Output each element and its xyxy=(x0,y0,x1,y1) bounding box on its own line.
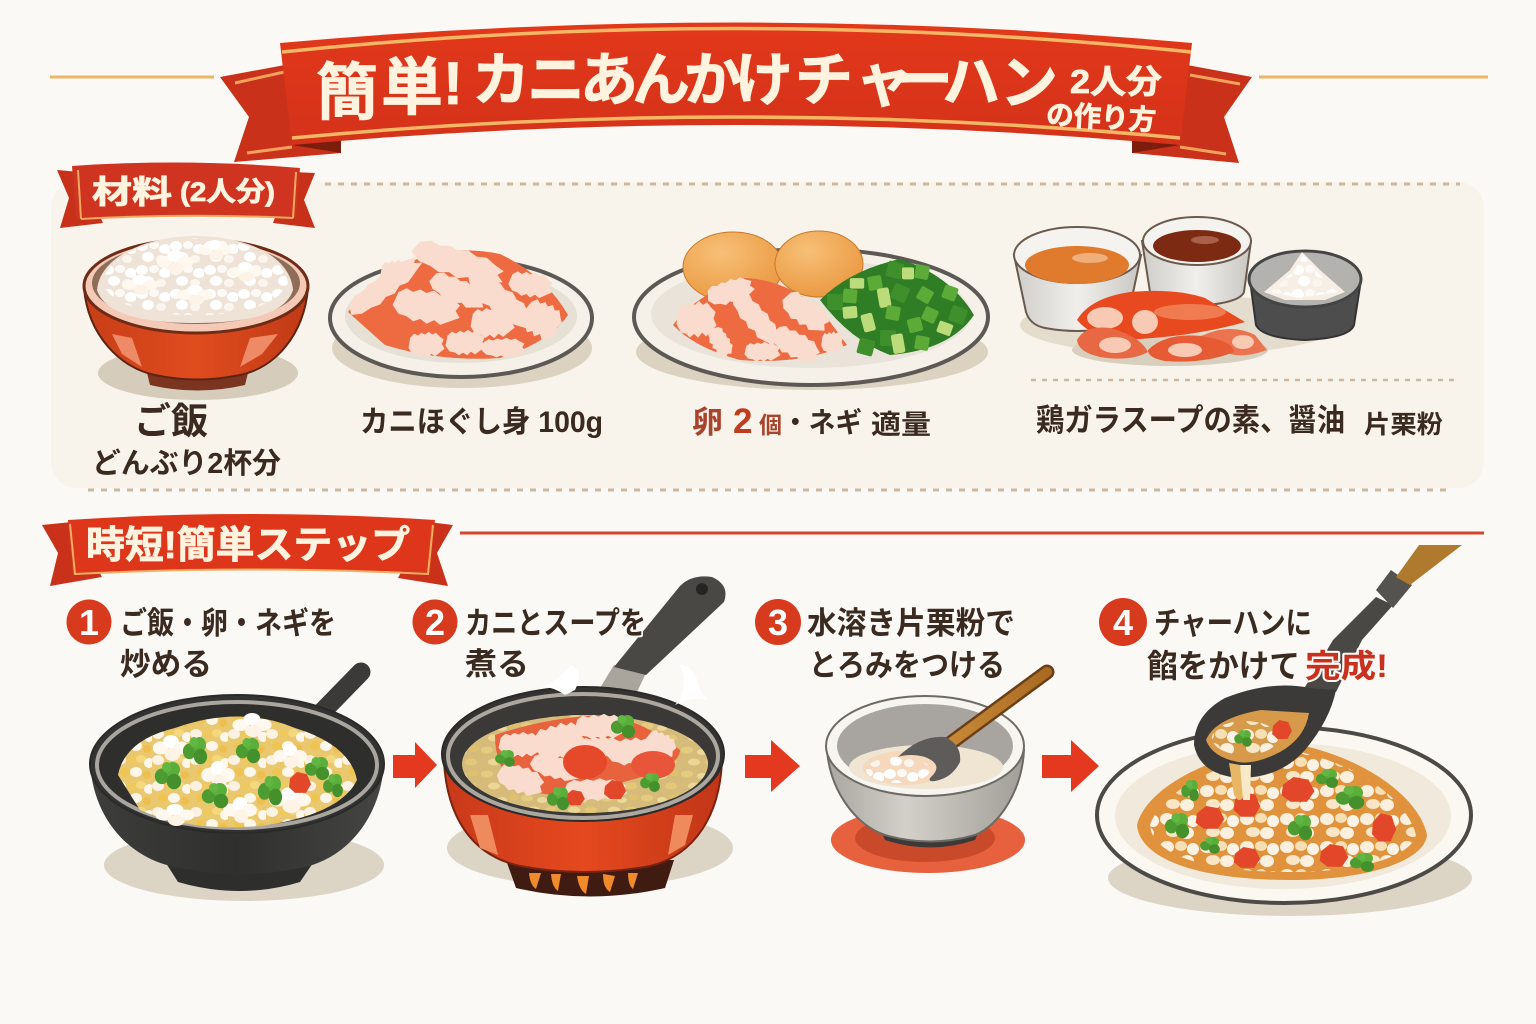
step 4 text: 完成! xyxy=(1305,648,1388,684)
label: egg and onion: 個 xyxy=(759,412,782,438)
step 4 text: チャーハンに xyxy=(1154,606,1312,641)
step 4 plate illustration xyxy=(1097,545,1472,916)
step 1 text: ご飯・卵・ネギを xyxy=(120,606,336,641)
label: egg and onion: 2 xyxy=(733,402,752,441)
ladle xyxy=(1194,545,1462,800)
step 1 number xyxy=(66,600,112,644)
step 2 pot illustration xyxy=(442,576,733,896)
step 2 number: 2 xyxy=(425,602,445,643)
step 1 text xyxy=(120,606,336,682)
ingredients heading ribbon: 材料 xyxy=(92,174,172,210)
step 1 xyxy=(66,600,384,901)
label: rice: ご飯 xyxy=(134,401,208,442)
step 3 number: 3 xyxy=(768,602,788,643)
title sub text: 2人分 xyxy=(1070,63,1162,100)
fried rice xyxy=(1137,745,1427,880)
label: seasonings: 片栗粉 xyxy=(1364,411,1443,439)
label: egg and onion: ・ネギ xyxy=(782,407,862,438)
step 4 number xyxy=(1099,598,1147,646)
label: rice: どんぶり2杯分 xyxy=(92,447,281,480)
arrow 2 xyxy=(745,740,800,792)
panel background xyxy=(51,182,1484,488)
burner xyxy=(506,860,674,896)
step 2 text xyxy=(465,606,646,682)
label: seasonings: 鶏ガラスープの素、醤油 xyxy=(1036,403,1345,438)
panel: ingredients xyxy=(51,162,1484,490)
step 3 text xyxy=(807,606,1015,683)
label: egg and onion: 卵 xyxy=(692,405,723,440)
label: egg and onion xyxy=(692,402,931,441)
title right rule xyxy=(1259,76,1488,78)
steps heading ribbon: 時短!簡単ステップ xyxy=(86,525,410,567)
label: rice xyxy=(92,401,281,480)
title text: ! xyxy=(443,50,463,117)
ingredients heading ribbon: (2人分) xyxy=(180,177,275,207)
crab sticks xyxy=(1072,291,1268,366)
label: crab: カニほぐし身 100g xyxy=(360,406,603,439)
step 3 xyxy=(755,599,1047,873)
step 4 xyxy=(1097,545,1472,916)
step 4 number: 4 xyxy=(1113,602,1133,643)
arrow 3 xyxy=(1042,740,1099,792)
pot handle xyxy=(600,576,726,692)
steam xyxy=(540,665,708,705)
ingredient: seasonings xyxy=(1014,217,1361,366)
title text: カニあんかけチャーハン xyxy=(472,48,1058,116)
cup: potato starch xyxy=(1249,251,1361,340)
eggs xyxy=(683,231,863,302)
arrow 1 xyxy=(393,742,437,788)
ingredient: crab plate xyxy=(330,235,592,388)
step 2 text: カニとスープを xyxy=(465,606,646,641)
label: egg and onion: 適量 xyxy=(871,410,931,440)
step 3 text: とろみをつける xyxy=(809,648,1005,683)
step 2 xyxy=(412,576,733,896)
title text: 簡単 xyxy=(316,54,443,128)
title sub text xyxy=(1045,63,1162,136)
ribbon main band xyxy=(280,22,1192,145)
cup: soy sauce xyxy=(1142,217,1251,306)
step 2 number xyxy=(412,600,458,644)
step 3 bowl illustration xyxy=(826,672,1047,873)
steps heading ribbon xyxy=(42,514,453,586)
title left rule xyxy=(50,76,214,78)
crab flakes xyxy=(673,274,847,369)
step 4 text: 餡をかけて xyxy=(1147,648,1300,684)
ingredient: rice bowl xyxy=(84,236,308,400)
step 3 text: 水溶き片栗粉で xyxy=(807,606,1015,641)
step 1 wok illustration xyxy=(90,672,384,901)
step 2 text: 煮る xyxy=(465,647,529,682)
cup: chicken stock xyxy=(1014,227,1141,331)
step 4 text xyxy=(1147,606,1388,684)
title banner xyxy=(220,22,1252,163)
spoon xyxy=(898,672,1047,781)
ingredients heading ribbon xyxy=(57,162,315,228)
title sub text: の作り方 xyxy=(1045,99,1157,136)
step 1 text: 炒める xyxy=(120,647,212,682)
green onion xyxy=(820,259,974,357)
step 1 number: 1 xyxy=(79,602,99,643)
step 3 number xyxy=(755,599,801,645)
ingredient: eggs and green onion plate xyxy=(634,231,988,390)
crab in pot xyxy=(494,714,680,810)
ribbon tails xyxy=(220,65,1252,163)
